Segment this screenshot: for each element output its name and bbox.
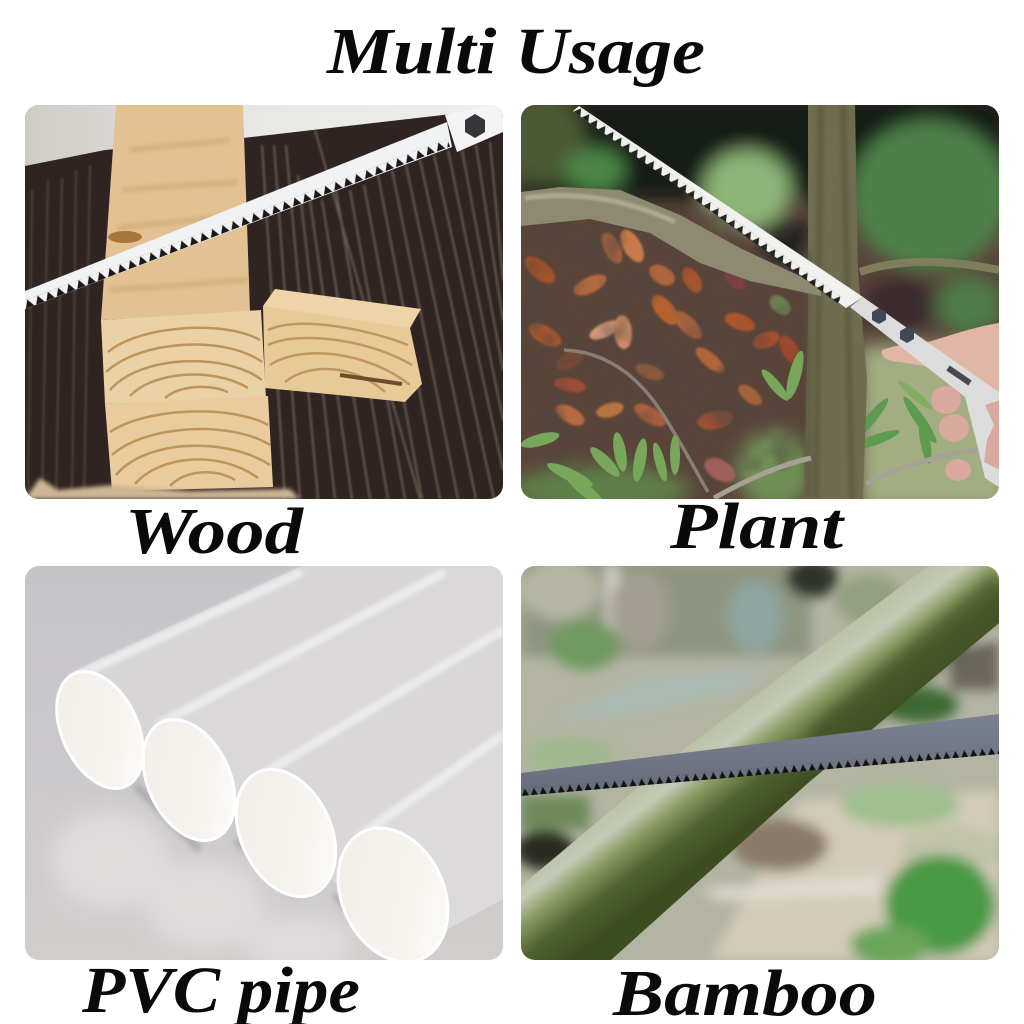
panel: wood [22,105,503,499]
wood chunk [263,289,422,402]
hand palm [882,323,999,395]
saw handle [850,297,1000,488]
mottled leaf shadow texture [521,235,811,450]
pipe 1 [55,566,444,790]
pipe 4 [336,732,503,960]
panel: plant [521,105,999,499]
pipe 2 [125,566,503,855]
label: plant: Plant [669,490,845,563]
panel: bamboo [515,558,1005,965]
title: Multi Usage [326,15,705,88]
wood beam [101,105,273,491]
label: wood: Wood [125,495,304,568]
blurred background foliage [515,558,1000,965]
pipe shadows [132,782,342,910]
panel: PVC pipe [25,566,503,980]
bamboo stem [521,566,999,960]
wall behind the floor [25,105,503,166]
floor reflections [51,809,350,960]
twig [564,350,708,492]
saw blade [520,714,999,796]
background foliage [521,105,999,499]
tree trunk [804,105,867,499]
sawdust [25,478,300,499]
fallen red leaves [520,226,805,487]
saw [573,105,863,308]
pipe 3 [235,628,503,898]
saw handle joint [445,105,503,152]
branches [521,187,821,296]
saw blade [22,105,503,309]
young pine sprigs [519,349,940,511]
fingers [931,386,971,481]
floor planks [28,130,503,499]
